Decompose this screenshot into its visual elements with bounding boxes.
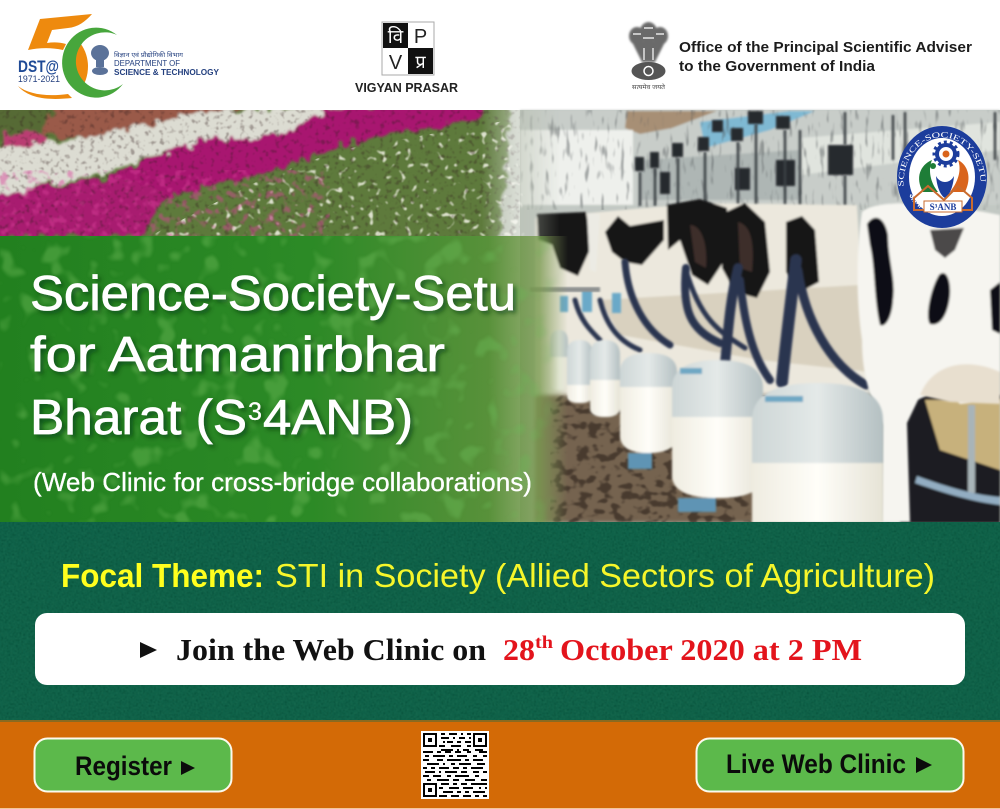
logo: Vigyan Prasar: VIGYAN PRASAR bbox=[355, 81, 458, 95]
logo: Vigyan Prasar: प्र bbox=[415, 52, 426, 72]
button: Live Web Clinic bbox=[696, 738, 964, 792]
jar 6 bbox=[752, 383, 883, 523]
date box: th bbox=[535, 632, 553, 652]
department name: SCIENCE & TECHNOLOGY bbox=[114, 67, 219, 77]
logo: Vigyan Prasar bbox=[355, 22, 458, 95]
left milking claws bbox=[560, 290, 621, 313]
title: for Aatmanirbhar bbox=[30, 328, 445, 382]
cow bodies bbox=[535, 199, 870, 420]
office name: Office of the Principal Scientific Adviser bbox=[679, 40, 972, 56]
parlour roof and pipes bbox=[520, 110, 1000, 210]
logo: DST 50 years bbox=[18, 14, 219, 99]
department name: DEPARTMENT OF bbox=[114, 58, 180, 68]
footer band bbox=[0, 720, 1000, 809]
focal theme heading: STI in Society (Allied Sectors of Agriculture) bbox=[275, 557, 935, 594]
logo figures bbox=[919, 160, 938, 192]
floor and udder behind the big cow bbox=[900, 395, 1000, 523]
DST label: DST@ bbox=[18, 57, 59, 76]
focal theme heading: Focal Theme: bbox=[61, 557, 264, 594]
department name: विज्ञान एवं प्रौद्योगिकी विभाग bbox=[114, 51, 183, 59]
office name bbox=[679, 40, 972, 75]
logo gear bbox=[937, 145, 955, 163]
logo: Science-Society-Setu: S³ANB bbox=[930, 202, 956, 212]
date box: Join the Web Clinic on bbox=[176, 632, 486, 667]
title bbox=[30, 267, 516, 445]
button: Live Web Clinic: Live Web Clinic bbox=[726, 749, 906, 779]
panel: green title block bbox=[0, 236, 568, 522]
logo: Vigyan Prasar: P bbox=[414, 26, 427, 48]
green crescent bbox=[62, 28, 123, 98]
button: Register bbox=[34, 738, 232, 792]
logo: Science-Society-Setu bbox=[897, 126, 987, 228]
ring text: आत्मनिर्भर भारत bbox=[910, 194, 932, 214]
numeral 5 bbox=[28, 14, 92, 50]
title: 3 bbox=[248, 398, 262, 426]
date box bbox=[35, 613, 965, 685]
milk jars bbox=[550, 330, 883, 523]
photo: dairy milking parlour bbox=[520, 108, 1000, 522]
title: 4ANB) bbox=[263, 391, 413, 445]
button: Register: Register bbox=[75, 751, 172, 781]
department name bbox=[114, 51, 219, 77]
title: Science-Society-Setu bbox=[30, 267, 516, 321]
date box: October 2020 at 2 PM bbox=[560, 632, 862, 667]
logo: national emblem bbox=[629, 22, 668, 91]
blue milking hoses bbox=[575, 260, 866, 385]
ring text: SCIENCE-SOCIETY-SETU bbox=[898, 132, 986, 186]
logo: Vigyan Prasar: वि bbox=[388, 25, 404, 48]
ground and tangled machinery bbox=[535, 395, 880, 523]
logo: national emblem: सत्यमेव जयते bbox=[632, 83, 666, 91]
big cow bbox=[858, 203, 1000, 522]
emblem small bbox=[91, 45, 109, 75]
logo: Vigyan Prasar: V bbox=[389, 52, 403, 74]
jar 1 bbox=[550, 330, 568, 390]
jar 2 bbox=[567, 340, 592, 403]
office name: to the Government of India bbox=[679, 59, 876, 75]
panel: focal theme background bbox=[0, 522, 1000, 721]
QR code bbox=[421, 731, 489, 799]
photo: flower field bbox=[0, 110, 556, 236]
date box: 28 bbox=[503, 632, 535, 667]
header band bbox=[0, 0, 1000, 110]
logo bridge bbox=[914, 186, 972, 210]
title: Bharat (S bbox=[30, 391, 247, 445]
jar 5 bbox=[672, 360, 763, 498]
logo: DST 50 years: 1971-2021 bbox=[18, 74, 60, 85]
jar 4 bbox=[620, 353, 677, 453]
ring text bbox=[898, 132, 986, 214]
jar 3 bbox=[590, 340, 620, 417]
subtitle: (Web Clinic for cross-bridge collaborations) bbox=[33, 467, 532, 497]
